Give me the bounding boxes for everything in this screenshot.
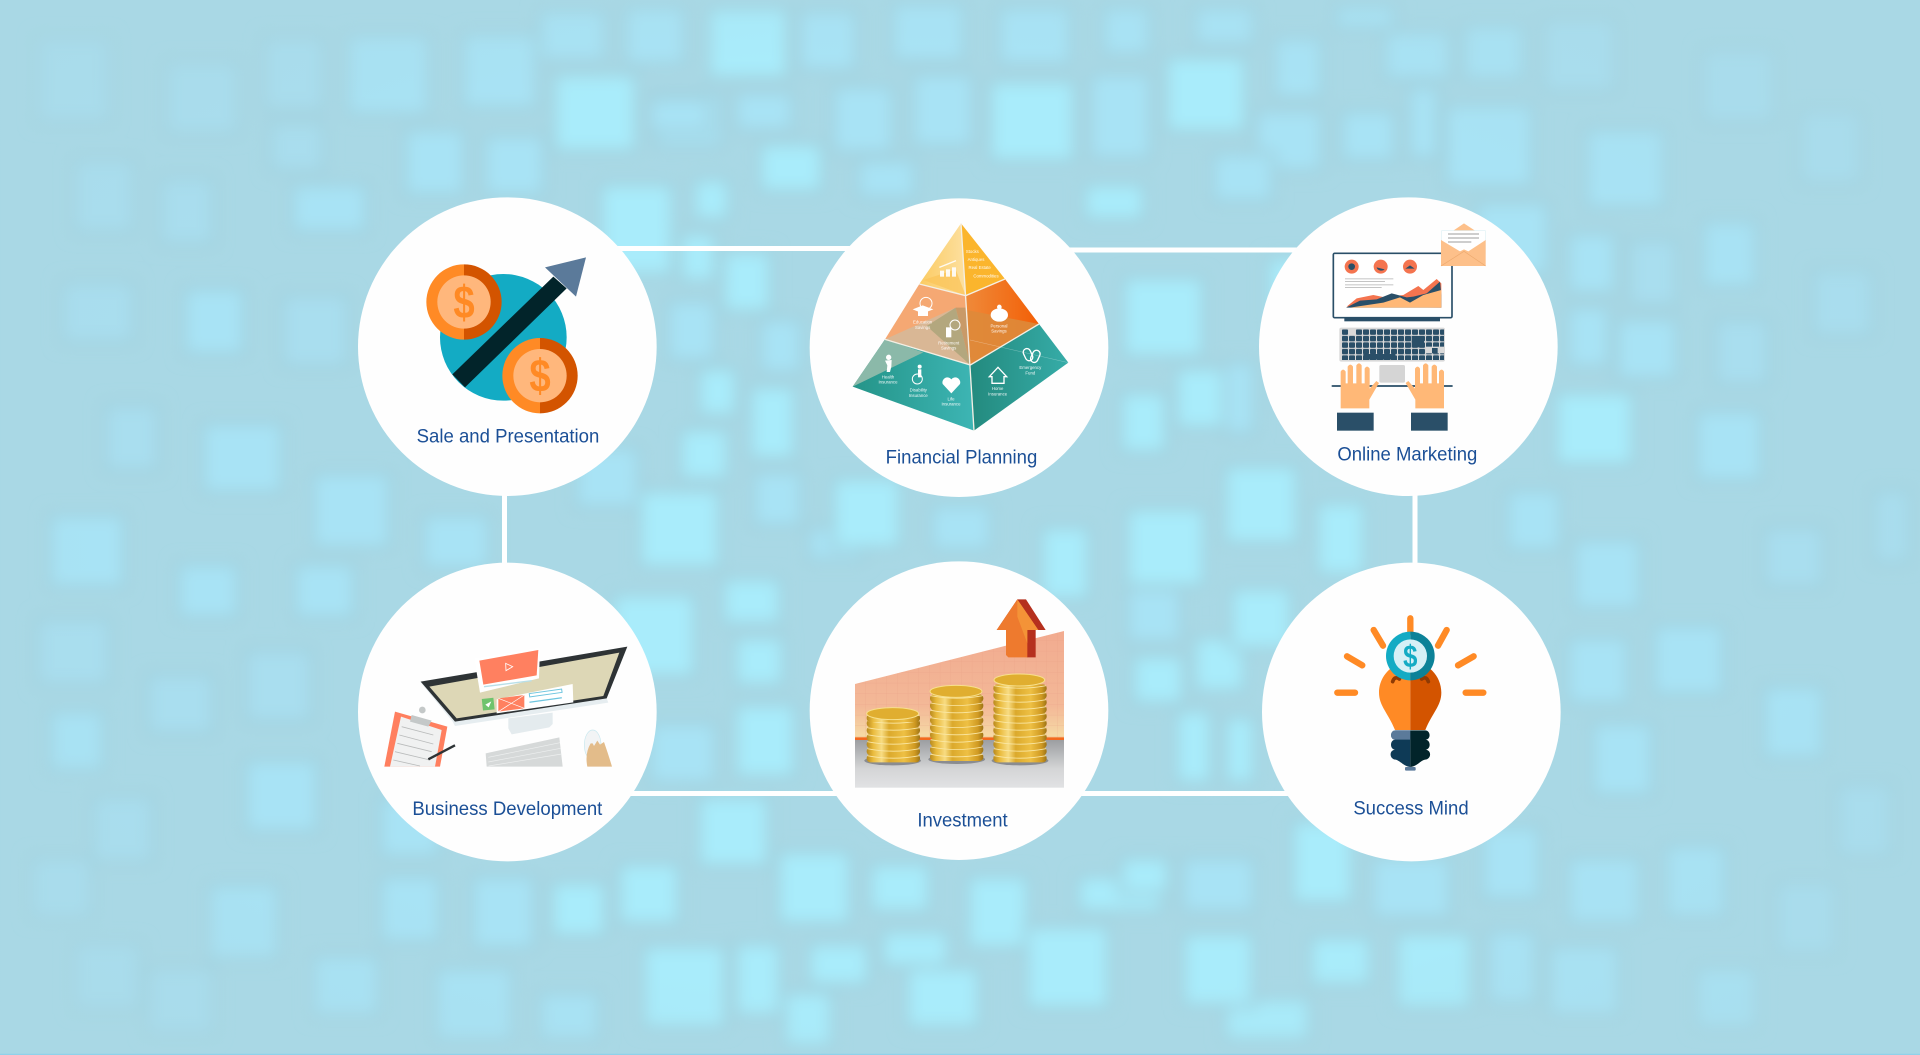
icon: coins and rising arrow: $ bbox=[453, 276, 475, 329]
video panel bbox=[474, 647, 540, 693]
icon: financial pyramid bbox=[853, 223, 1068, 431]
panel: Success Mind bbox=[1262, 563, 1561, 861]
icon: financial pyramid: Education bbox=[913, 320, 933, 325]
icon: financial pyramid: Disability bbox=[910, 388, 928, 393]
keyboard bbox=[486, 737, 563, 767]
icon: financial pyramid: Savings bbox=[915, 325, 930, 330]
label: Financial Planning: Financial Planning bbox=[886, 447, 1037, 468]
icon: financial pyramid: Real Estate bbox=[968, 265, 991, 270]
panel: Financial Planning bbox=[810, 198, 1108, 497]
mouse and hand bbox=[584, 730, 601, 760]
icon: running person bbox=[885, 355, 892, 372]
icon: desktop workspace bbox=[384, 647, 627, 767]
icon: financial pyramid: Stocks bbox=[966, 249, 979, 254]
icon: wheelchair bbox=[912, 365, 922, 384]
email card on screen bbox=[497, 684, 573, 713]
icon: financial pyramid: Insurance bbox=[988, 391, 1008, 396]
icon: financial pyramid: Insurance bbox=[909, 393, 928, 398]
label: Investment: Investment bbox=[917, 811, 1008, 832]
icon: pills bbox=[1022, 347, 1041, 364]
connector lines between circles bbox=[502, 246, 1418, 796]
clipboard bbox=[384, 712, 447, 767]
icon: financial pyramid: Life bbox=[948, 396, 955, 401]
icon: up arrow bbox=[997, 599, 1046, 657]
icon: financial pyramid: Health bbox=[882, 374, 895, 379]
panel: Sale and Presentation bbox=[358, 197, 657, 496]
icon: heart bbox=[942, 377, 960, 393]
icon: retirement figure bbox=[946, 320, 960, 337]
icon: financial pyramid: Personal bbox=[990, 323, 1008, 328]
icon: coin stacks with up arrow bbox=[855, 599, 1064, 788]
panel: Online Marketing bbox=[1259, 197, 1558, 496]
icon: financial pyramid: Commodities bbox=[973, 273, 999, 278]
icon: financial pyramid: Savings bbox=[991, 329, 1007, 334]
panel: Investment bbox=[810, 561, 1108, 860]
icon: financial pyramid: Home bbox=[992, 386, 1004, 391]
icon: coins and rising arrow bbox=[426, 257, 586, 413]
icon: financial pyramid: Fund bbox=[1025, 370, 1036, 375]
(filler layer) bbox=[539, 10, 606, 61]
label: Business Development: Business Development bbox=[412, 799, 603, 820]
icon: piggy bank bbox=[991, 305, 1008, 322]
icon: financial pyramid: Insurance bbox=[941, 402, 961, 407]
icon: house bbox=[989, 367, 1007, 383]
icon: light bulb with dollar coin bbox=[1337, 618, 1483, 771]
label: Sale and Presentation: Sale and Presentation bbox=[417, 427, 599, 448]
icon: financial pyramid: Retirement bbox=[938, 340, 960, 345]
icon: coins and rising arrow: $ bbox=[529, 350, 551, 403]
icon: envelope bbox=[1441, 223, 1486, 266]
label: Success Mind: Success Mind bbox=[1353, 798, 1469, 819]
(bright layer) bbox=[37, 37, 110, 122]
icon: financial pyramid: Savings bbox=[941, 346, 956, 351]
icon: laptop with hands and envelope bbox=[1332, 223, 1486, 431]
icon: graduation cap bbox=[913, 297, 933, 316]
label: Online Marketing: Online Marketing bbox=[1337, 445, 1477, 466]
icon: rising bars bbox=[939, 261, 956, 277]
icon: financial pyramid: Antiques bbox=[968, 257, 984, 262]
icon: financial pyramid: Emergency bbox=[1019, 365, 1042, 370]
icon: light bulb with dollar coin: $ bbox=[1403, 640, 1418, 675]
panel: Business Development bbox=[358, 563, 657, 861]
icon: financial pyramid: Insurance bbox=[878, 380, 898, 385]
